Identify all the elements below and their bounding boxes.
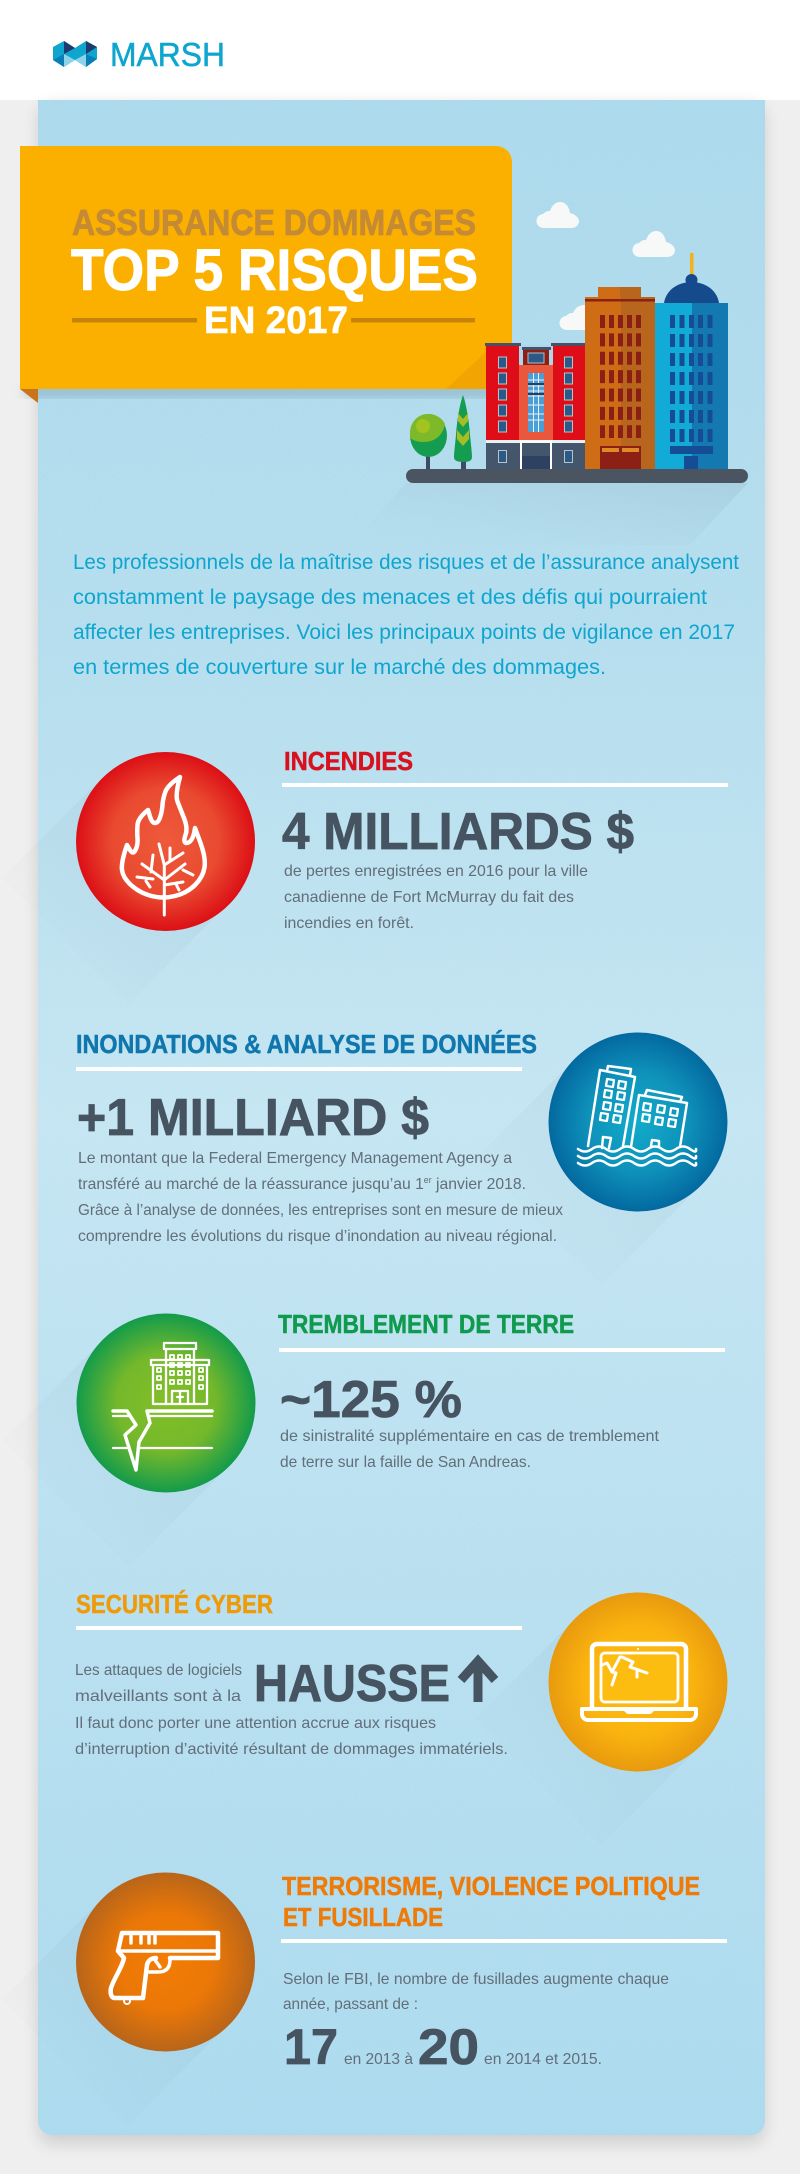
intro paragraph: Les professionnels de la maîtrise des risques et de l’assurance analysent bbox=[73, 551, 739, 574]
body text intro: Les attaques de logiciels bbox=[75, 1662, 242, 1679]
header bar bbox=[0, 0, 800, 100]
body text: incendies en forêt. bbox=[284, 915, 414, 932]
clouds bbox=[536, 202, 675, 330]
ground bbox=[406, 469, 748, 483]
icon: earthquake building bbox=[76, 1314, 256, 1492]
intro paragraph: en termes de couverture sur le marché des dommages. bbox=[73, 656, 606, 679]
body text intro bbox=[75, 1662, 242, 1705]
banner fold bbox=[20, 389, 38, 403]
key figure: +1 MILLIARD $ bbox=[77, 1089, 429, 1147]
body text: canadienne de Fort McMurray du fait des bbox=[284, 889, 574, 906]
panel: tremblement de terre bbox=[76, 1309, 725, 1492]
body text: comprendre les évolutions du risque d’inondation au niveau régional. bbox=[78, 1228, 557, 1245]
title line 3 with rules: EN 2017 bbox=[204, 300, 348, 342]
heading bbox=[282, 1871, 700, 1932]
body text intro: malveillants sont à la bbox=[75, 1688, 241, 1705]
body text: d’interruption d’activité résultant de dommages immatériels. bbox=[75, 1741, 508, 1758]
blue building bbox=[655, 253, 728, 469]
arrow up bbox=[461, 1661, 495, 1702]
intro paragraph: constamment le paysage des menaces et des défis qui pourraient bbox=[73, 586, 707, 609]
body text bbox=[283, 1971, 669, 2013]
intro paragraph: affecter les entreprises. Voici les principaux points de vigilance en 2017 bbox=[73, 621, 735, 644]
title line 2: TOP 5 RISQUES bbox=[71, 238, 478, 303]
logo: Marsh: MARSH bbox=[110, 36, 225, 73]
body text: de pertes enregistrées en 2016 pour la ville bbox=[284, 863, 588, 880]
body text: janvier 2018. bbox=[432, 1176, 526, 1193]
panel: incendies bbox=[76, 746, 728, 932]
icon: cracked laptop bbox=[548, 1592, 728, 1772]
icon: pistol bbox=[76, 1872, 255, 2052]
key figures: 20 bbox=[418, 2019, 479, 2075]
red building bbox=[485, 343, 585, 469]
key figure: 4 MILLIARDS $ bbox=[282, 803, 634, 861]
cone tree bbox=[454, 395, 472, 469]
key figure: HAUSSE bbox=[254, 1655, 450, 1713]
key figures bbox=[284, 2019, 602, 2075]
key figures: 17 bbox=[284, 2019, 338, 2075]
body text bbox=[78, 1150, 563, 1245]
key figures: en 2013 à bbox=[344, 2051, 413, 2068]
body text: de terre sur la faille de San Andreas. bbox=[280, 1454, 531, 1471]
body text: année, passant de : bbox=[283, 1996, 418, 2013]
body text: er bbox=[424, 1175, 432, 1185]
heading: TERRORISME, VIOLENCE POLITIQUE bbox=[282, 1871, 700, 1901]
heading: INCENDIES bbox=[284, 746, 413, 776]
body text: Il faut donc porter une attention accrue aux risques bbox=[75, 1715, 436, 1732]
heading: TREMBLEMENT DE TERRE bbox=[278, 1309, 574, 1339]
body text: Le montant que la Federal Emergency Management Agency a bbox=[78, 1150, 512, 1167]
body text bbox=[75, 1715, 508, 1758]
body text bbox=[280, 1428, 660, 1471]
illustration: city bbox=[406, 253, 748, 483]
heading: ET FUSILLADE bbox=[283, 1902, 443, 1932]
round tree bbox=[410, 414, 447, 469]
body text: de sinistralité supplémentaire en cas de tremblement bbox=[280, 1428, 660, 1445]
body text: Grâce à l’analyse de données, les entreprises sont en mesure de mieux bbox=[78, 1202, 563, 1219]
long shadows behind city and circles bbox=[2, 483, 748, 2125]
title line 1: ASSURANCE DOMMAGES bbox=[72, 202, 476, 243]
logo: Marsh bbox=[53, 36, 225, 73]
panel: terrorisme bbox=[76, 1871, 727, 2075]
heading: INONDATIONS & ANALYSE DE DONNÉES bbox=[76, 1029, 537, 1059]
panel: securite cyber bbox=[75, 1589, 728, 1772]
icon: flooded buildings bbox=[548, 1032, 728, 1212]
body text: Selon le FBI, le nombre de fusillades augmente chaque bbox=[283, 1971, 669, 1988]
heading: SECURITÉ CYBER bbox=[76, 1589, 273, 1619]
orange building bbox=[585, 287, 655, 469]
title line 3 with rules bbox=[72, 300, 475, 342]
icon: flame bbox=[76, 752, 255, 931]
panel: inondations bbox=[76, 1029, 728, 1245]
body text bbox=[284, 863, 588, 932]
title banner bbox=[20, 146, 512, 403]
key figure: ~125 % bbox=[280, 1371, 462, 1429]
intro paragraph bbox=[73, 551, 739, 679]
key figures: en 2014 et 2015. bbox=[484, 2051, 602, 2068]
body text: transféré au marché de la réassurance jusqu’au 1 bbox=[78, 1176, 430, 1193]
